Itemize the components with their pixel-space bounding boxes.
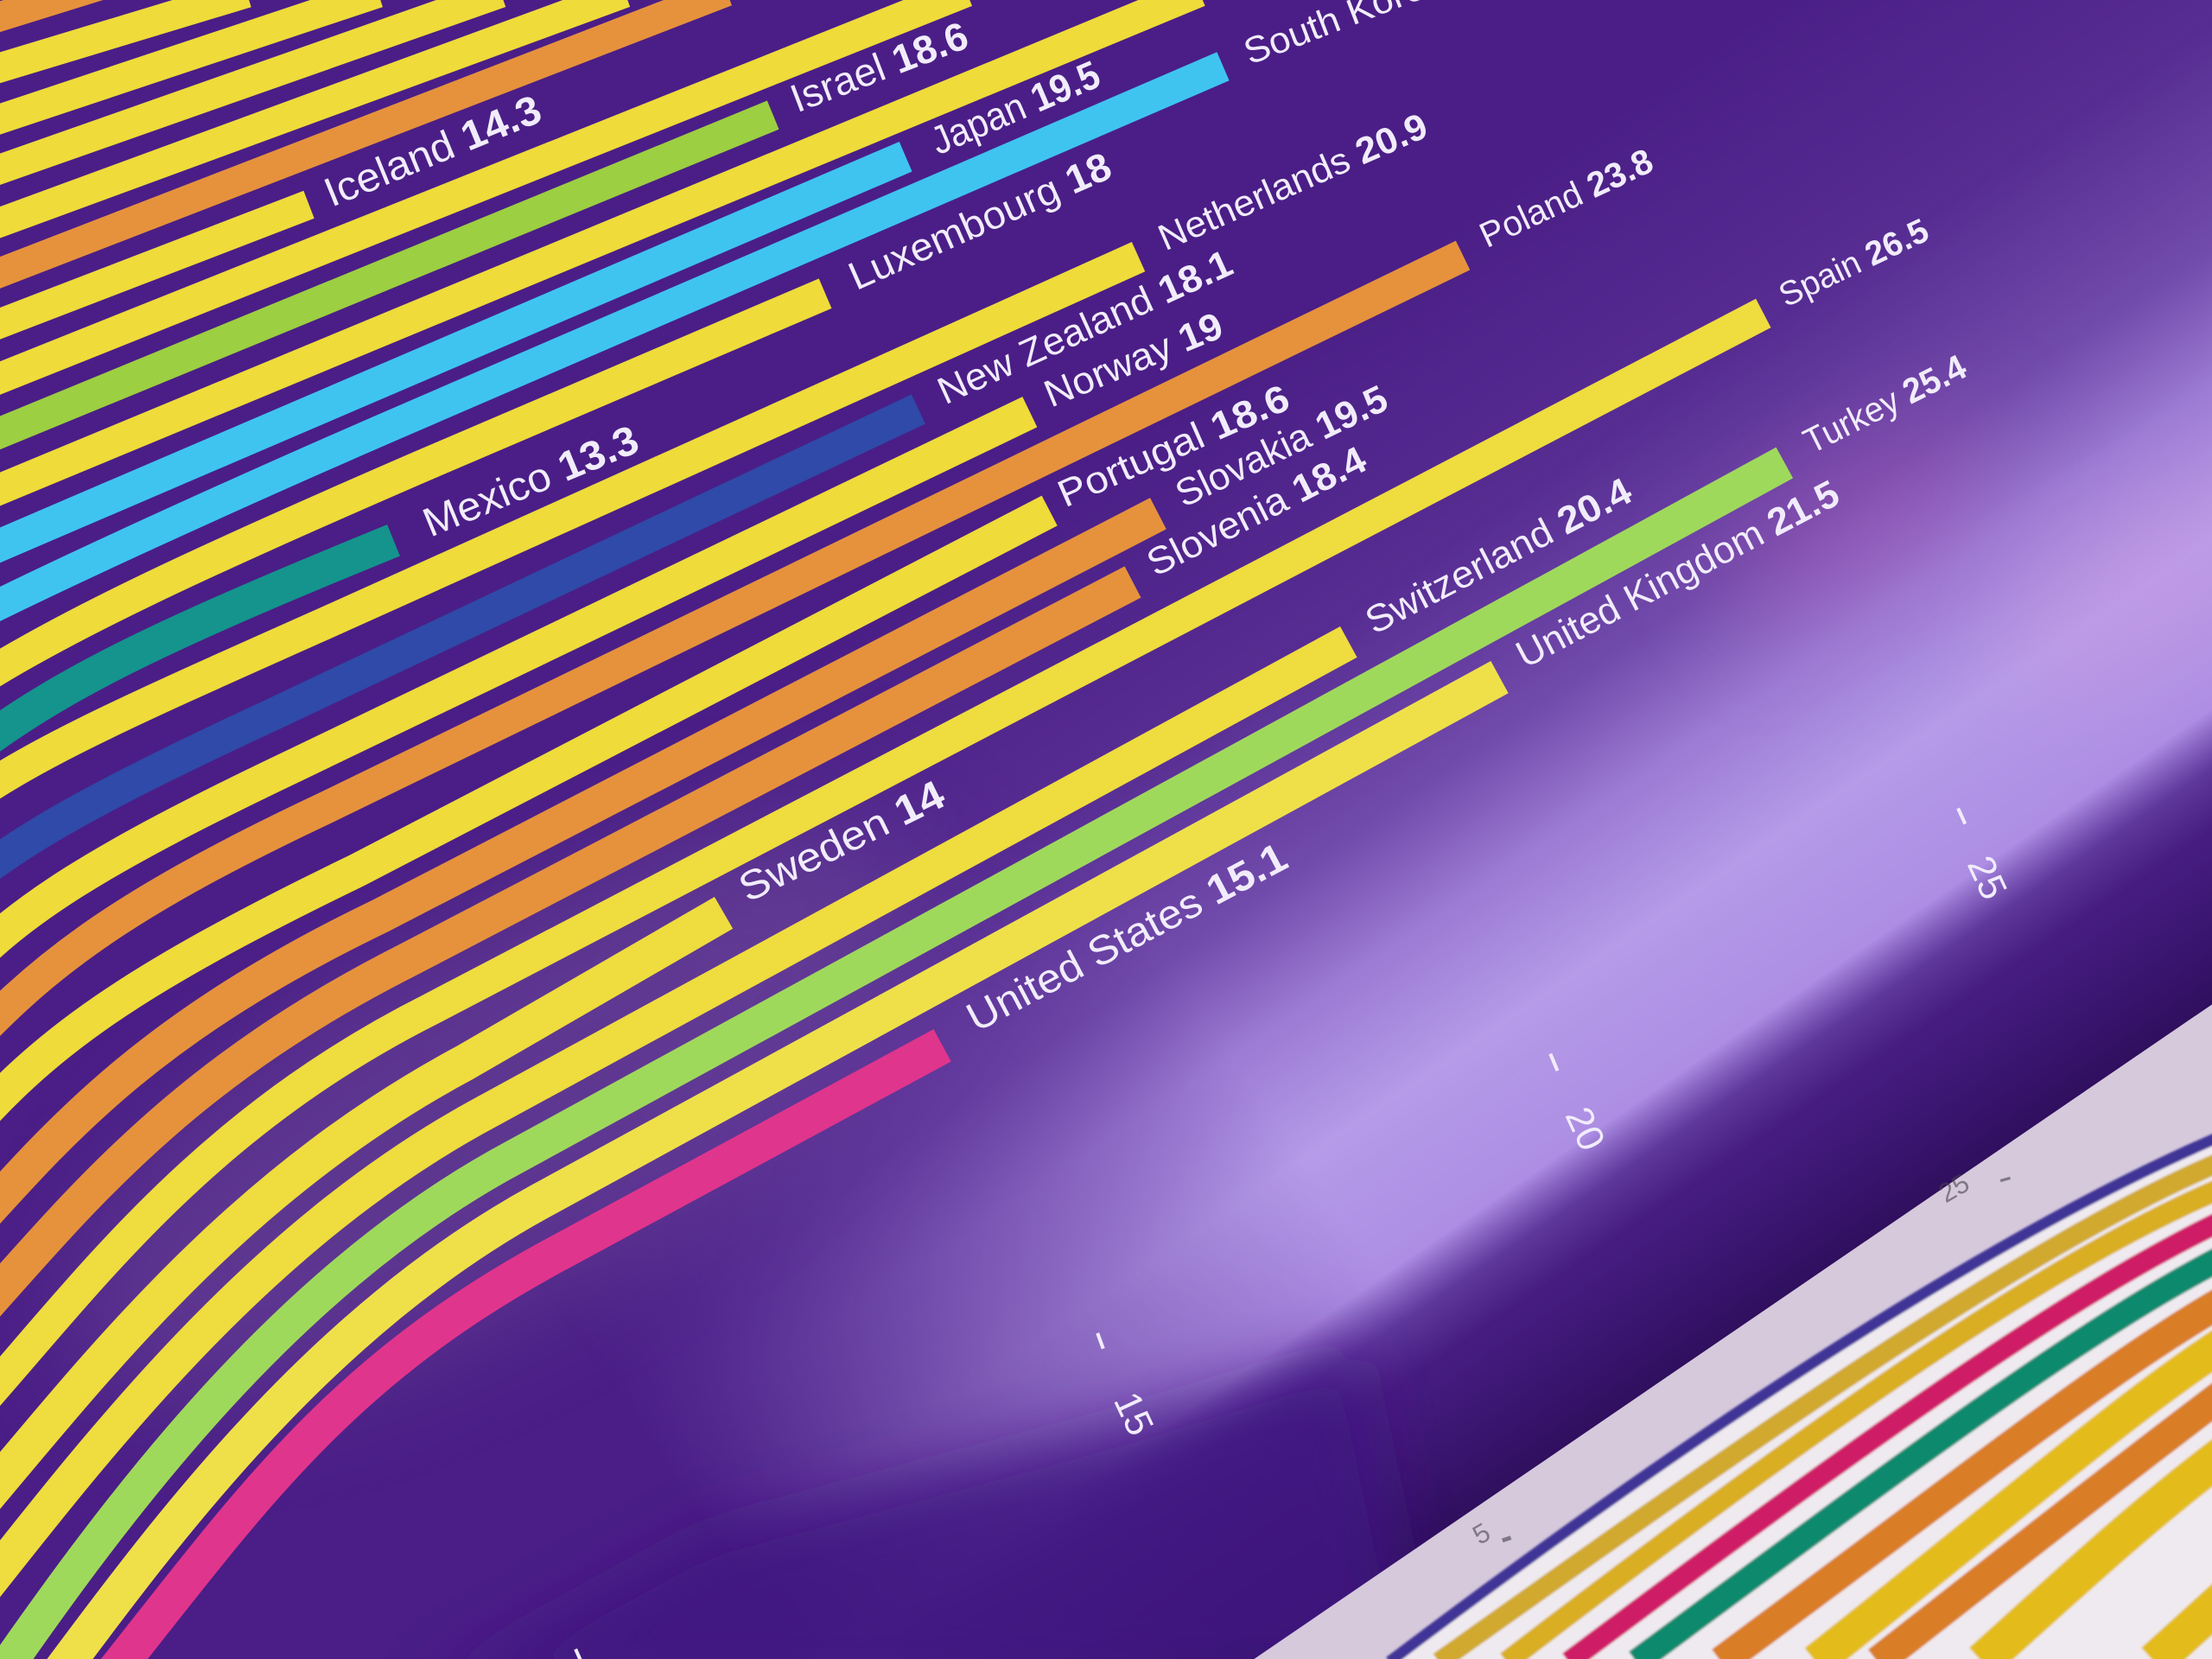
bar: off-page orange	[0, 0, 99, 25]
bar: Luxembourg	[0, 144, 1118, 694]
bar: Netherlands: Netherlands 20.9	[1152, 105, 1433, 258]
bar: Switzerland: Switzerland 20.4	[1358, 470, 1639, 643]
bar: Netherlands	[0, 105, 1433, 818]
bar: Portugal: Portugal 18.6	[1052, 377, 1296, 516]
facing page scale labels: 5	[1467, 1517, 1496, 1550]
axis: scale ticks and numbers: 25	[1959, 849, 2015, 906]
bar: United States: United States 15.1	[959, 834, 1295, 1041]
bar: Norway: Norway 19	[1038, 304, 1229, 416]
bar: Spain: Spain 26.5	[1773, 212, 1935, 315]
bar: off-page yellow 2	[0, 0, 378, 129]
axis: scale ticks and numbers: 20	[1557, 1101, 1613, 1157]
bar: Iceland	[0, 86, 548, 334]
facing page scale labels	[1467, 1167, 2011, 1550]
bar: South Korea	[0, 0, 1451, 618]
bar: New Zealand: New Zealand 18.1	[931, 242, 1239, 413]
bar: Japan	[0, 53, 1106, 557]
bar: Sweden	[0, 772, 952, 1530]
bar: Turkey: Turkey 25.4	[1797, 346, 1973, 461]
bar: United Kingdom: United Kingdom 21.5	[1510, 473, 1847, 677]
bar: Slovenia	[0, 438, 1374, 1338]
bar: off-page yellow 4	[0, 0, 625, 232]
bar: Israel	[0, 13, 974, 444]
bar: Norway	[0, 304, 1229, 975]
bar: Iceland: Iceland 14.3	[318, 86, 548, 216]
bar: off-page yellow 3	[0, 0, 501, 179]
bar: Slovakia: Slovakia 19.5	[1169, 378, 1395, 516]
bar: Mexico	[0, 416, 645, 773]
bar: Israel: Israel 18.6	[785, 13, 974, 121]
bar: Sweden: Sweden 14	[732, 772, 952, 912]
bar: Slovakia	[0, 378, 1395, 1244]
bar: Luxembourg: Luxembourg 18	[842, 144, 1118, 298]
bar: United States	[92, 834, 1295, 1659]
facing page scale labels: 25	[1934, 1167, 1974, 1209]
bar: Italy, runs off the page	[0, 0, 1199, 501]
axis: scale ticks and numbers	[575, 809, 2015, 1659]
facing page: white page with curved stripes	[1254, 1004, 2212, 1659]
bar: New Zealand	[0, 242, 1239, 892]
bar: Mexico: Mexico 13.3	[416, 416, 645, 546]
bar: Portugal	[0, 377, 1296, 1142]
bar: Poland: Poland 23.8	[1473, 141, 1659, 256]
bar: Ireland, runs off the page	[0, 0, 966, 390]
axis: scale ticks and numbers: 15	[1105, 1386, 1161, 1442]
bar: Japan: Japan 19.5	[925, 53, 1106, 163]
bar: off-page orange 2	[0, 0, 727, 283]
bar: Slovenia: Slovenia 18.4	[1140, 438, 1374, 585]
bar: off-page yellow 1	[0, 0, 247, 76]
